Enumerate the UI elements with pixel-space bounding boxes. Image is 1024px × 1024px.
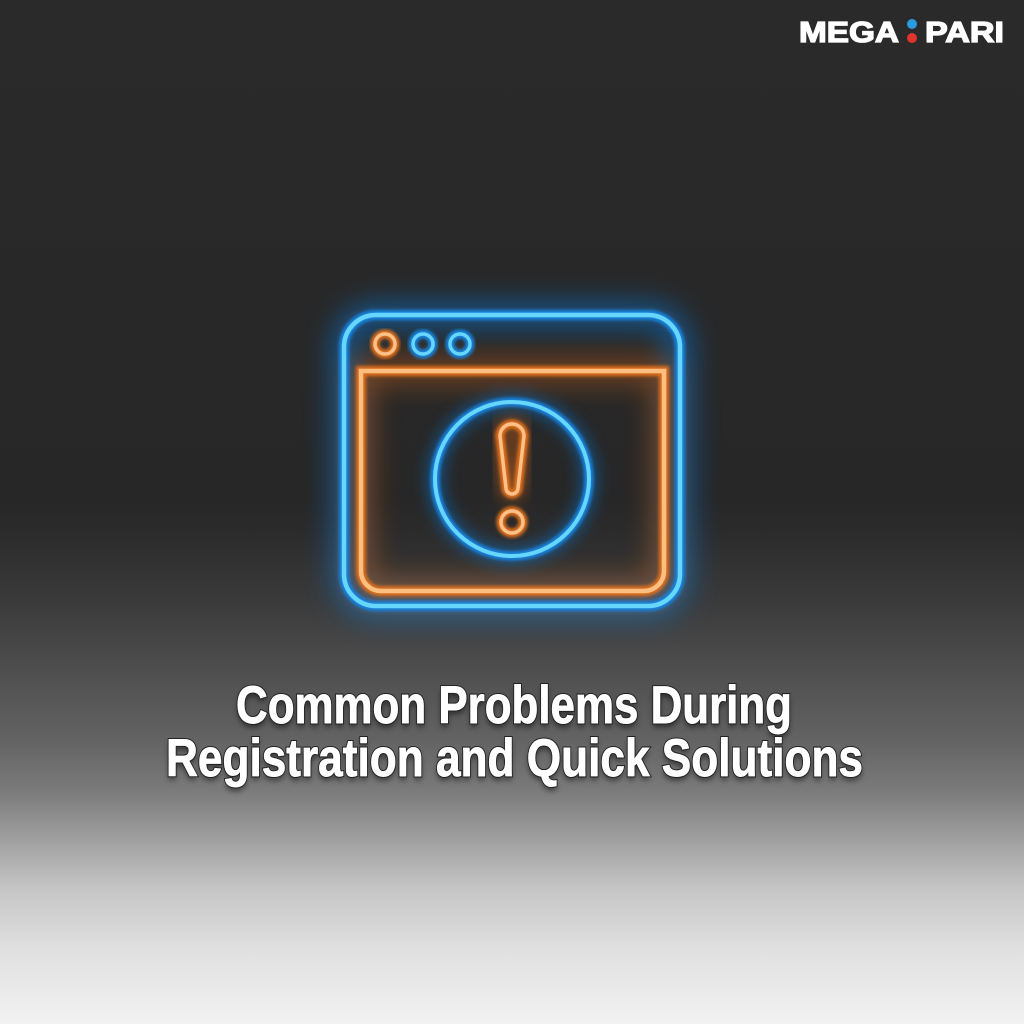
blue warning circle [435, 402, 589, 556]
exclamation mark [500, 424, 524, 533]
orange window dot [375, 334, 395, 354]
orange content frame [361, 371, 664, 591]
title: Registration and Quick Solutions [166, 729, 863, 788]
logo blue dot [907, 19, 917, 29]
title: Registration and Quick Solutions [166, 733, 863, 792]
outer blue window frame [344, 315, 680, 606]
logo: MEGA [799, 17, 899, 49]
title [166, 676, 863, 792]
soft glow behind frames [344, 315, 680, 606]
title: Common Problems During [236, 676, 792, 735]
icon: neon browser window with warning [344, 315, 680, 606]
title: Common Problems During [236, 676, 792, 735]
logo [799, 17, 1004, 49]
title: Registration and Quick Solutions [166, 729, 863, 788]
blue window dot 2 [450, 334, 470, 354]
title: Common Problems During [236, 680, 792, 739]
logo red dot [907, 33, 917, 43]
logo: PARI [925, 17, 1004, 49]
blue window dot 1 [413, 334, 433, 354]
